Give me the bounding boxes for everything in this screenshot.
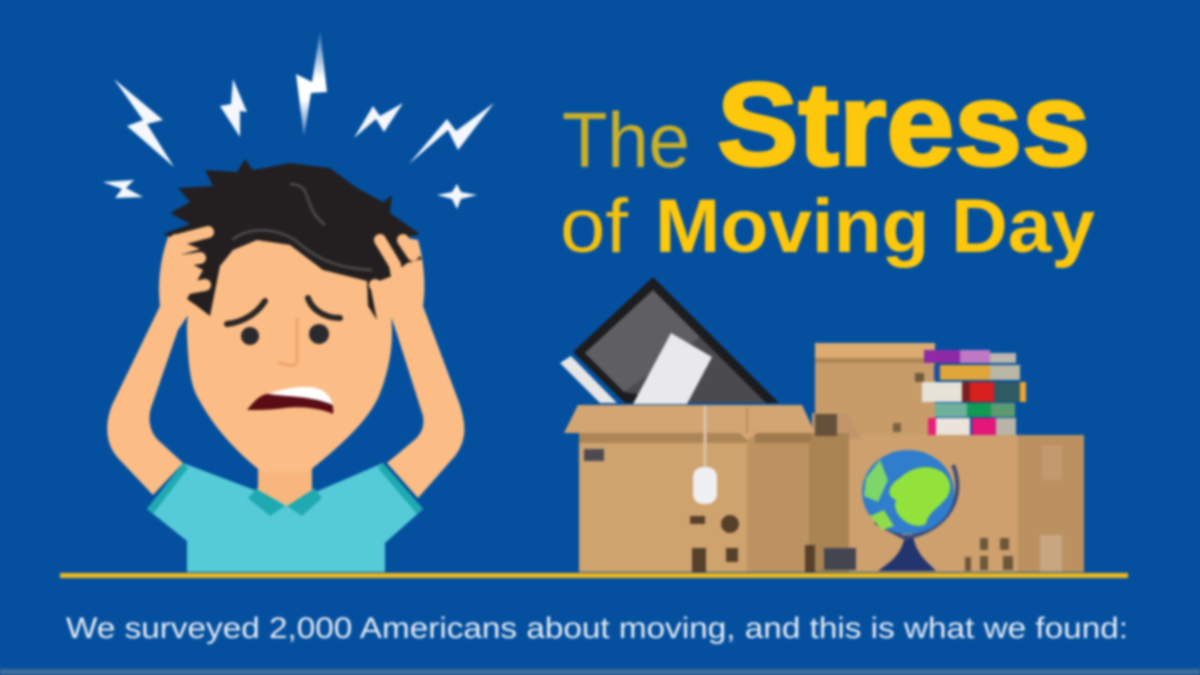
title line 2: Moving Day (655, 184, 1095, 269)
illustration: moving boxes (560, 277, 1084, 572)
eyes (241, 324, 329, 345)
mouse and cable (693, 405, 717, 504)
back box (815, 343, 935, 438)
right box (812, 413, 1084, 572)
face (187, 205, 392, 472)
title line 2: of (560, 184, 629, 269)
nose (278, 318, 297, 365)
survey intro text: We surveyed 2,000 Americans about moving, and this is what we found: (66, 612, 1128, 645)
divider line (60, 573, 1128, 578)
hair (163, 159, 422, 320)
eyebrows (227, 298, 340, 324)
illustration: stressed man (107, 159, 464, 572)
hair highlight (232, 184, 372, 270)
title line 1: The (562, 96, 690, 184)
stack of books (922, 350, 1026, 435)
hands (172, 232, 413, 305)
mouth (247, 387, 333, 414)
title line 1: Stress (717, 59, 1090, 191)
monitor (560, 277, 779, 404)
icon: stress lightning bolts (103, 31, 494, 209)
title line 1 (562, 59, 1090, 191)
title (560, 59, 1095, 269)
arms (107, 232, 464, 498)
open box (564, 405, 856, 572)
globe (862, 450, 957, 571)
neck (258, 445, 312, 506)
t-shirt (147, 463, 423, 572)
